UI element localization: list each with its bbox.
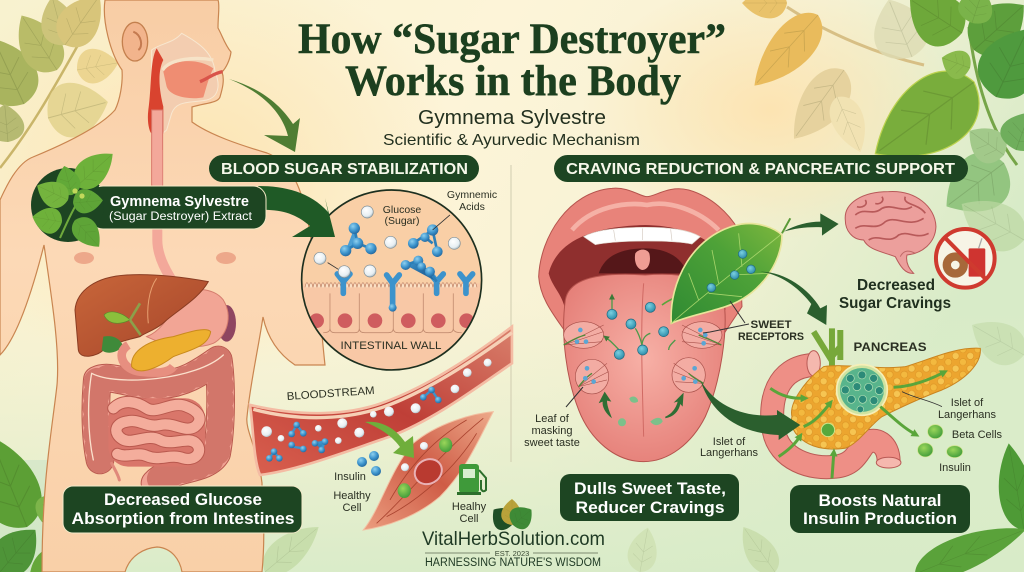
tongue and pancreas labels: masking [532,425,572,437]
taste buds [564,322,722,394]
subtitle [383,107,640,149]
intestinal wall magnified circle [302,190,482,370]
title: How “Sugar Destroyer” [298,16,726,63]
decorative foliage: top left [0,0,121,168]
subtitle: Gymnema Sylvestre [418,107,606,129]
circle labels: INTESTINAL WALL [340,340,442,352]
green arrows [770,373,942,478]
pancreas small [132,330,211,371]
glucose balls [314,206,460,278]
sugar molecules on tongue [607,302,669,359]
tongue and pancreas labels: SWEET [750,319,792,331]
tongue and pancreas labels: RECEPTORS [738,331,804,343]
small intestine [108,398,205,467]
icon: fuel pump [457,464,486,495]
spleen [217,305,236,342]
arrow: extract to body [229,79,300,152]
tongue and pancreas labels: Langerhans [700,447,759,459]
brand logo [422,499,605,569]
duodenum [122,345,173,373]
cell labels: Insulin [334,471,366,483]
extract banner with leaves: Gymnema Sylvestre [110,194,249,210]
beta cells [918,425,963,458]
section heading: craving reduction [554,155,968,182]
green spots [618,396,663,426]
cell labels: Healthy [333,490,371,502]
tongue arrows [607,298,675,350]
subtitle: Scientific & Ayurvedic Mechanism [383,132,640,149]
mouth interior [549,225,725,310]
head cross section [122,22,223,185]
insulin dots [357,451,381,476]
pill: decreased glucose absorption: Absorption from Intestines [72,509,294,528]
bloodstream vessel [250,327,512,475]
icon: no sweets [936,229,995,288]
circle labels: Glucose [383,204,421,216]
masking leaf [671,218,790,323]
liver [75,275,208,356]
section heading: blood sugar stabilization: BLOOD SUGAR STABILIZATION [221,161,468,178]
tongue and pancreas labels [524,319,1003,474]
circle labels [340,189,497,352]
title [298,16,726,105]
duodenum [772,365,889,467]
stomach [147,290,228,347]
muscle cell [363,412,493,530]
arrow: extract into intestine [258,186,335,237]
pill: boosts insulin: Boosts Natural [818,491,942,510]
section heading: craving reduction: CRAVING REDUCTION & PANCREATIC SUPPORT [566,161,955,178]
decreased sugar cravings label: Decreased [857,277,935,294]
extract banner with leaves [30,142,335,254]
brand logo: EST. 2023 [495,549,529,558]
pill: boosts insulin: Insulin Production [803,509,957,528]
tongue and pancreas labels: Leaf of [535,413,570,425]
tongue and pancreas labels: Langerhans [938,409,997,421]
colon [89,355,223,483]
blue molecules in blood [266,387,442,462]
tongue and pancreas labels: sweet taste [524,437,580,449]
title: Works in the Body [345,58,681,105]
extract banner with leaves: (Sugar Destroyer) Extract [109,211,253,223]
human body figure [0,0,325,572]
divider [510,165,512,462]
circle labels: Gymnemic [447,189,497,201]
brain icon [845,192,936,273]
pill: dulls sweet taste: Reducer Cravings [576,498,724,517]
tongue and pancreas labels: Islet of [713,436,746,448]
cell labels: Cell [343,502,361,514]
pointer lines [566,301,749,407]
glucose in blood [261,359,492,444]
bile duct [814,328,840,367]
tongue and pancreas labels: Beta Cells [952,429,1003,441]
teeth [584,227,700,245]
digestive organs [75,150,236,483]
pill: dulls sweet taste: Dulls Sweet Taste, [574,479,726,498]
cell labels [333,471,487,525]
pancreas illustration [770,328,980,478]
appendix [112,463,119,480]
decreased sugar cravings label [839,277,951,312]
tongue and mouth illustration [539,188,742,462]
pill: decreased glucose absorption [63,486,302,533]
lips [539,188,742,337]
pill: boosts insulin [790,485,970,533]
decorative foliage: top right [740,0,1024,231]
cell labels: Cell [460,513,478,525]
arrow: tongue to pancreas [700,380,800,440]
pill: decreased glucose absorption: Decreased Glucose [104,490,262,509]
arrow: leaf to brain [784,213,839,236]
gallbladder [102,303,141,353]
tongue [564,274,725,462]
arrow: leaf to pancreas [760,272,827,325]
brand logo: VitalHerbSolution.com [422,528,605,550]
pill: dulls sweet taste [560,474,739,521]
islet [837,365,887,415]
circle labels: Acids [459,201,485,213]
decreased sugar cravings label: Sugar Cravings [839,295,951,312]
tongue and pancreas labels: PANCREAS [854,340,926,354]
pancreas body [791,348,980,449]
tongue and pancreas labels: Islet of [951,397,984,409]
icon: logo leaves [486,499,538,534]
arrow: bloodstream to cell [365,422,414,458]
esophagus [157,150,178,290]
arrows on craving panel [700,213,839,440]
dark tongue arrows [599,392,612,418]
brand logo: HARNESSING NATURE'S WISDOM [425,557,601,569]
circle labels: (Sugar) [384,215,420,227]
cell labels: Healhy [452,501,487,513]
bloodstream label: BLOODSTREAM [286,385,375,403]
section heading: blood sugar stabilization [209,155,479,182]
decorative foliage: right side and bottom [0,185,1024,572]
tongue and pancreas labels: Insulin [939,462,971,474]
receptors [337,274,473,307]
gymnemic acid molecules [340,223,443,312]
